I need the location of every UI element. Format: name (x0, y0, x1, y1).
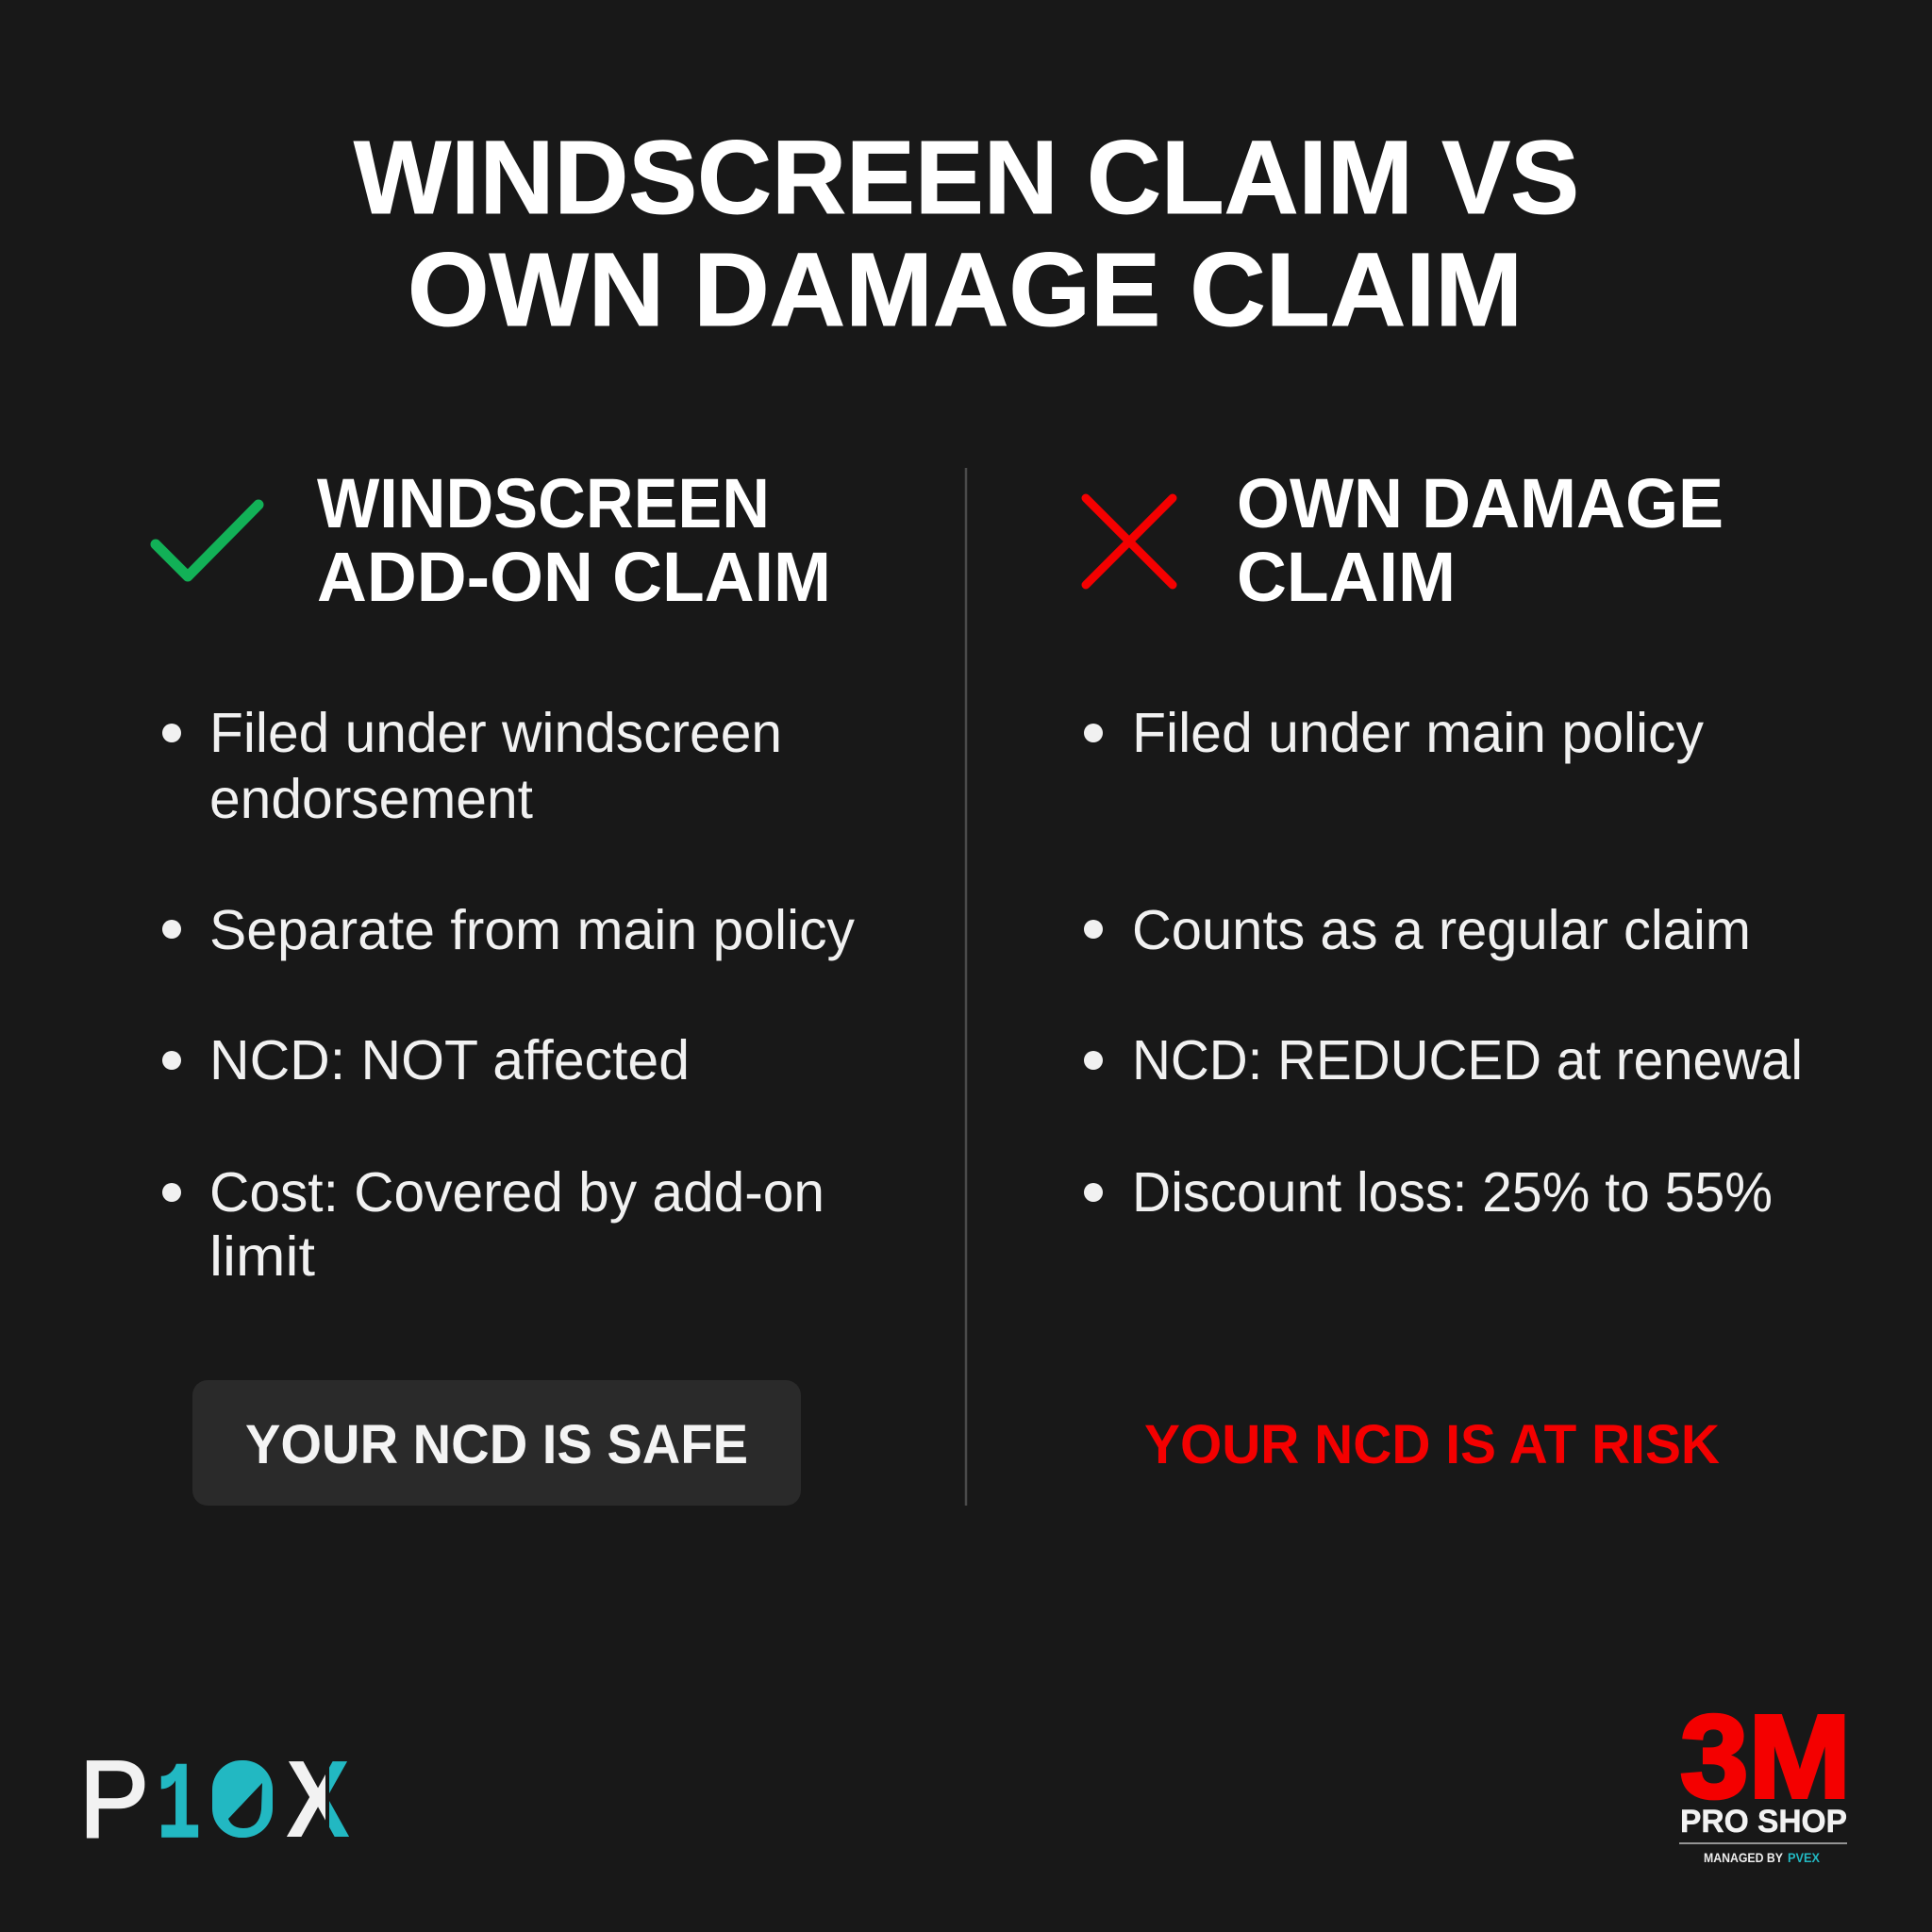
title: WINDSCREEN CLAIM VS (354, 120, 1579, 236)
callout: your NCD is at risk: YOUR NCD IS AT RISK (1144, 1414, 1720, 1475)
logo: 3M Pro Shop: 3M (1680, 1691, 1851, 1823)
logo: 3M Pro Shop: PVEX (1788, 1851, 1820, 1865)
logo: P10X: P (79, 1738, 149, 1860)
heading: windscreen add-on claim: WINDSCREEN (317, 464, 770, 542)
logo: P10X (79, 1738, 350, 1870)
bullet list: windscreen: Separate from main policy (209, 899, 855, 961)
logo: P10X: 1 (157, 1745, 201, 1870)
bullet list: windscreen: endorsement (209, 768, 533, 830)
bullet list: windscreen (162, 702, 855, 1288)
bullet list: own damage: Discount loss: 25% to 55% (1132, 1161, 1773, 1224)
bullet list: own damage (1084, 702, 1803, 1224)
heading: own damage claim (1237, 464, 1724, 616)
bullet list: windscreen: Cost: Covered by add-on (209, 1161, 824, 1224)
bullet list: own damage: Filed under main policy (1132, 702, 1704, 764)
title: OWN DAMAGE CLAIM (408, 232, 1523, 348)
logo: P10X: X (286, 1738, 350, 1860)
bullet list: windscreen: Filed under windscreen (209, 702, 782, 764)
icon: red cross (1086, 498, 1173, 585)
bullet list: windscreen: NCD: NOT affected (209, 1029, 690, 1091)
bullet list: own damage: NCD: REDUCED at renewal (1132, 1029, 1803, 1091)
heading: own damage claim: OWN DAMAGE (1237, 464, 1724, 542)
bullet list: own damage: Counts as a regular claim (1132, 899, 1751, 961)
callout: your NCD is safe (192, 1380, 801, 1506)
panel: own damage claim (1084, 464, 1803, 1475)
icon: green check mark (156, 505, 258, 576)
panel: windscreen add-on claim (156, 464, 855, 1506)
callout: your NCD is safe: YOUR NCD IS SAFE (245, 1414, 748, 1475)
heading: own damage claim: CLAIM (1237, 538, 1456, 616)
heading: windscreen add-on claim (317, 464, 831, 616)
logo: 3M Pro Shop: PRO SHOP (1680, 1804, 1847, 1840)
logo: P10X: 0 (212, 1741, 273, 1859)
bullet list: windscreen: limit (209, 1225, 315, 1288)
logo: 3M Pro Shop: MANAGED BY (1704, 1851, 1783, 1865)
heading: windscreen add-on claim: ADD-ON CLAIM (317, 538, 831, 616)
title (354, 120, 1579, 348)
